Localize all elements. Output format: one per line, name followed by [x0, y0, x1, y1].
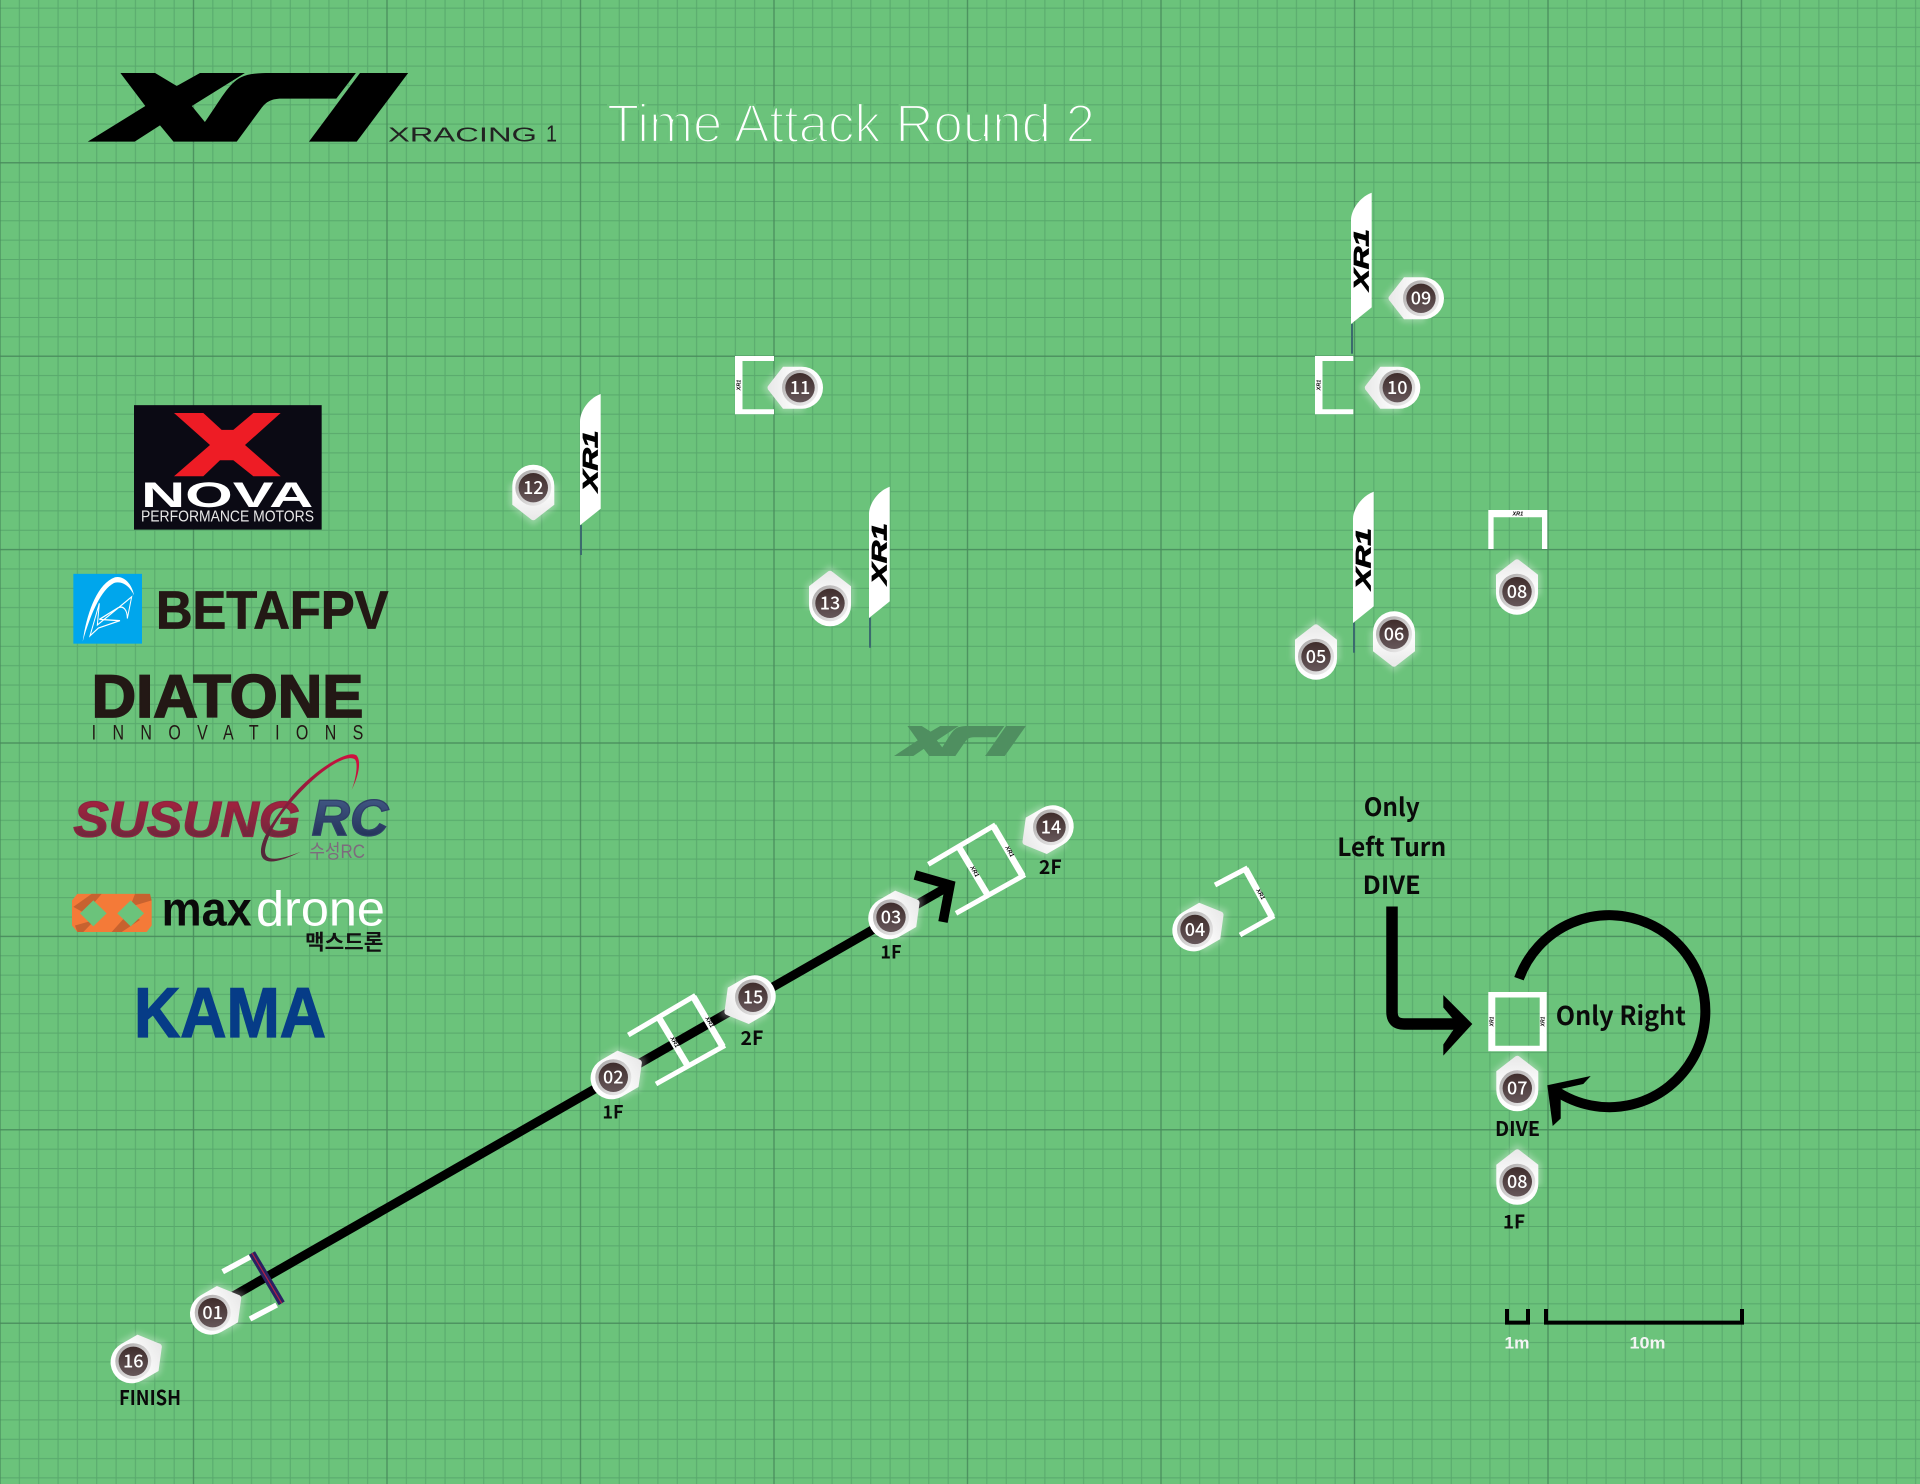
sponsor: Diatone Innovations: INNOVATIONS: [92, 720, 363, 744]
gate: double gate 03-14: XR1: [1003, 844, 1015, 859]
gate: 04: [1215, 869, 1272, 935]
callout: only left turn dive: [1337, 788, 1446, 902]
label: FINISH: FINISH: [119, 1382, 181, 1411]
pin 04: 04: [1185, 916, 1205, 942]
sponsor: Maxdrone: max: [162, 883, 252, 937]
pin 09: [1383, 274, 1444, 322]
sponsor logos: [72, 405, 390, 1053]
label: 1F at 08: 1F: [1503, 1207, 1525, 1234]
sponsor: Maxdrone: drone: [256, 882, 385, 937]
flag 2: [1352, 492, 1376, 653]
pin 13: 13: [820, 590, 840, 616]
pin 15: 15: [743, 984, 763, 1010]
pin 10: 10: [1387, 374, 1408, 400]
label: 1F at 02: 1F: [602, 1098, 624, 1124]
gate: double gate 02-15: [628, 997, 723, 1084]
route line with arrow: [228, 875, 950, 1299]
pin 14: 14: [1041, 814, 1061, 840]
pin 16: [101, 1322, 178, 1394]
callout: only left turn dive: Only: [1364, 788, 1420, 824]
pin 08 upper: 08: [1507, 578, 1527, 604]
arrow: right loop: [1519, 915, 1705, 1126]
flag 1: XR1: [1350, 229, 1374, 292]
title: Time Attack Round 2: [607, 94, 1095, 154]
scale: 10m: 10m: [1630, 1334, 1666, 1352]
sponsor: Kama: KAMA: [134, 974, 326, 1053]
sponsor: Susung RC: [73, 754, 390, 862]
flag 3: [580, 394, 602, 555]
gate: 07 square dive gate: [1488, 992, 1547, 1051]
pin 16: 16: [123, 1348, 144, 1374]
pin 03: [859, 878, 936, 950]
gate: start: [223, 1253, 282, 1319]
gate: 11: XR1: [736, 380, 742, 391]
pin 12: 12: [523, 474, 544, 500]
gate: top 08: [1488, 510, 1547, 549]
gate: 04: XR1: [1254, 887, 1266, 902]
pin 05: 05: [1306, 643, 1326, 669]
sponsor: Nova Performance Motors: [134, 405, 322, 530]
sponsor: BetaFPV: BETAFPV: [156, 580, 388, 641]
label: 1F at 03: 1F: [880, 938, 902, 964]
sponsor: Diatone Innovations: DIATONE: [92, 663, 363, 730]
pin 12: [509, 465, 557, 526]
flag 3: XR1: [580, 431, 602, 493]
sponsor: Maxdrone: [72, 882, 385, 954]
pin 10: [1359, 364, 1420, 412]
sponsor: Susung RC: 수성RC: [309, 841, 365, 862]
callout: only left turn dive: Left Turn: [1337, 828, 1446, 864]
pin 09: 09: [1411, 285, 1431, 311]
callout: only left turn dive: DIVE: [1363, 866, 1421, 902]
gate: top 08: XR1: [1511, 512, 1523, 518]
gate: double gate 02-15: XR1: [703, 1015, 715, 1030]
gate: 10: XR1: [1316, 380, 1322, 391]
pin 14: [1006, 795, 1083, 867]
sponsor: Susung RC: SUSUNG: [73, 791, 300, 848]
gate: double gate 03-14: [928, 826, 1023, 913]
arrow: left turn into dive gate: [1392, 906, 1472, 1056]
sponsor: Maxdrone: 맥스드론: [305, 930, 383, 954]
pin 07: 07: [1507, 1075, 1528, 1101]
flag 1: [1350, 193, 1374, 354]
pin 02: [581, 1038, 658, 1110]
scale: 1m: [1504, 1309, 1530, 1352]
label: 2F at 14: 2F: [1039, 851, 1062, 880]
sponsor: Nova Performance Motors: NOVA: [141, 476, 313, 515]
pin 08 lower: [1493, 1144, 1541, 1205]
flag 2: XR1: [1352, 528, 1376, 591]
pin 13: [806, 565, 854, 626]
pin 01: 01: [202, 1299, 223, 1325]
pin 07: [1493, 1050, 1541, 1111]
gate: 11: [735, 356, 774, 414]
gate: 07 square dive gate: XR1: [1540, 1016, 1546, 1027]
logo wordmark: XRACING: [388, 124, 537, 146]
pin 01: [181, 1273, 258, 1345]
pin 15: [708, 965, 785, 1037]
sponsor: BetaFPV: [73, 574, 388, 644]
pin 06: [1370, 611, 1418, 672]
sponsor: Nova Performance Motors: PERFORMANCE MOTORS: [141, 507, 314, 525]
callout: only right: Only Right: [1556, 996, 1686, 1033]
sponsor: Susung RC: RC: [312, 789, 390, 847]
flag 4: XR1: [868, 523, 892, 586]
pin 06: 06: [1384, 621, 1404, 647]
pin 11: 11: [790, 374, 810, 400]
gate: double gate 03-14: XR1: [968, 864, 980, 879]
sponsor: Diatone Innovations: [92, 663, 363, 744]
pin 11: [762, 364, 823, 412]
pin 03: 03: [881, 904, 901, 930]
pin 08 lower: 08: [1507, 1168, 1528, 1194]
pin 08 upper: [1493, 554, 1541, 615]
label: 2F at 15: 2F: [741, 1022, 763, 1051]
watermark logo: [894, 726, 1026, 756]
pin 02: 02: [603, 1064, 624, 1090]
scale: 10m: [1546, 1309, 1742, 1352]
scale: 1m: 1m: [1504, 1334, 1530, 1352]
label: DIVE at 07: DIVE: [1495, 1113, 1540, 1142]
pin 05: [1292, 619, 1340, 680]
logo wordmark: 1: [546, 120, 557, 146]
gate: 10: [1315, 356, 1353, 414]
flag 4: [868, 487, 892, 648]
gate: 07 square dive gate: XR1: [1490, 1016, 1496, 1027]
gate: double gate 02-15: XR1: [668, 1035, 680, 1050]
logo mark: [88, 73, 408, 142]
logo wordmark: [388, 120, 557, 146]
pin 04: [1163, 890, 1240, 962]
logo: XR1 XRACING 1: [88, 73, 557, 146]
